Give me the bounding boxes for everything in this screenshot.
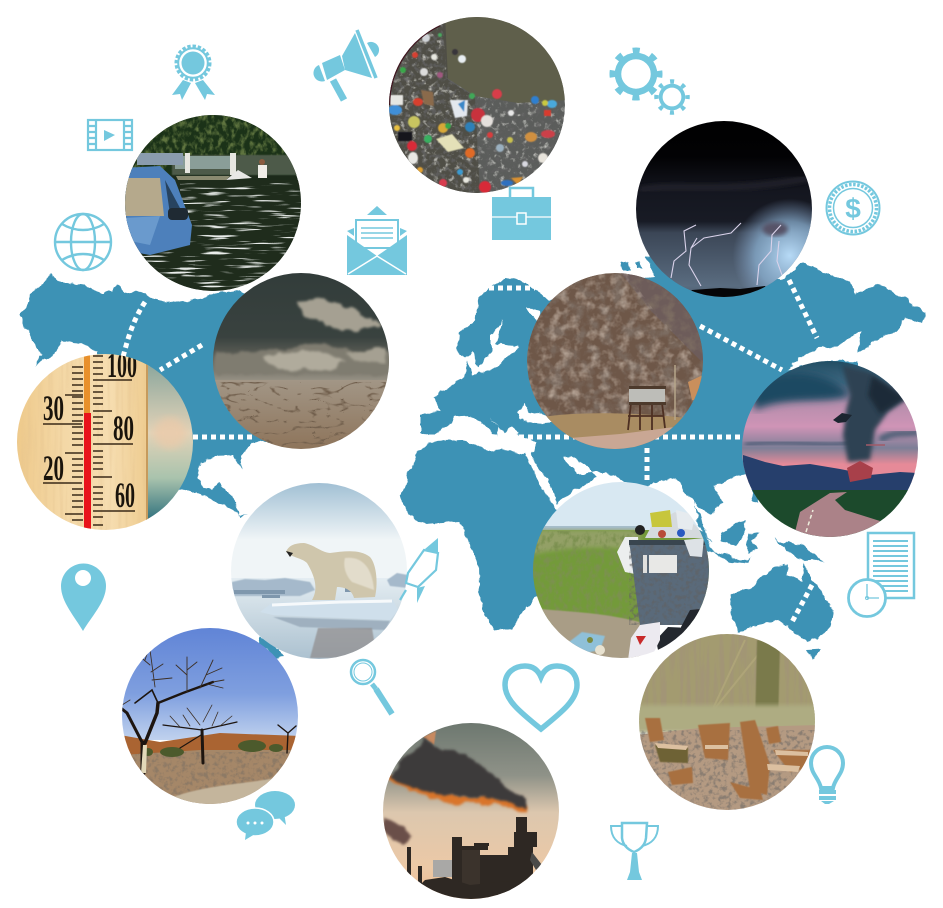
photo: dead trees in desert xyxy=(122,628,298,804)
celebes xyxy=(747,532,760,552)
photo: overflowing trash bin xyxy=(530,480,715,665)
photo: polar bear on ice xyxy=(228,480,413,663)
thermometer scale numbers: 30 xyxy=(43,388,64,428)
photo: plastic waste in water xyxy=(385,14,570,199)
photo: factory smoke xyxy=(380,720,565,905)
eurasia xyxy=(420,257,925,543)
arctic islands xyxy=(620,261,641,270)
icon: magnifying glass xyxy=(351,660,392,714)
java xyxy=(713,552,752,563)
photo: lightning storm xyxy=(636,121,812,297)
africa xyxy=(401,440,570,630)
borneo xyxy=(721,520,746,547)
icon: globe xyxy=(55,214,111,270)
icon: heart xyxy=(505,666,577,729)
icon: open envelope xyxy=(347,206,407,275)
icon: dollar coin: $ xyxy=(845,193,861,224)
gulf and inland seas xyxy=(516,306,863,473)
thermometer scale numbers: 20 xyxy=(43,448,64,488)
icon: trophy xyxy=(611,823,658,880)
icon: gears xyxy=(612,50,688,112)
thermometer scale numbers: 100 xyxy=(107,345,137,385)
icon: chat bubbles xyxy=(236,791,295,840)
world map xyxy=(20,257,925,658)
photo: tornado xyxy=(740,358,920,540)
icon: document xyxy=(868,533,914,598)
photo: drought clouds and cracked earth xyxy=(210,270,395,452)
tasmania xyxy=(808,649,819,658)
dotted region borders xyxy=(123,280,817,622)
new guinea xyxy=(773,538,825,563)
north america xyxy=(20,275,300,518)
sumatra xyxy=(697,527,714,552)
icon: briefcase xyxy=(492,188,551,240)
south america fragment xyxy=(258,637,284,658)
icon: rocket xyxy=(400,538,438,603)
photo: rocky mountain landslide xyxy=(525,272,710,450)
icon: megaphone xyxy=(313,30,379,100)
icon: award ribbon xyxy=(172,46,215,100)
thermometer scale numbers: 60 xyxy=(115,475,135,515)
icon: dollar coin xyxy=(826,182,880,234)
icon: light bulb xyxy=(811,747,843,804)
australia xyxy=(729,563,833,643)
thermometer scale numbers: 80 xyxy=(113,408,134,448)
photo: wooden thermometer xyxy=(15,345,196,533)
photo: flood xyxy=(125,115,301,291)
icon: film strip xyxy=(88,120,132,150)
photo: deforestation stumps xyxy=(635,630,820,815)
thermometer scale numbers xyxy=(44,354,136,508)
philippines xyxy=(751,490,759,503)
icon: clock xyxy=(848,580,886,616)
icon: location pin xyxy=(61,564,106,631)
